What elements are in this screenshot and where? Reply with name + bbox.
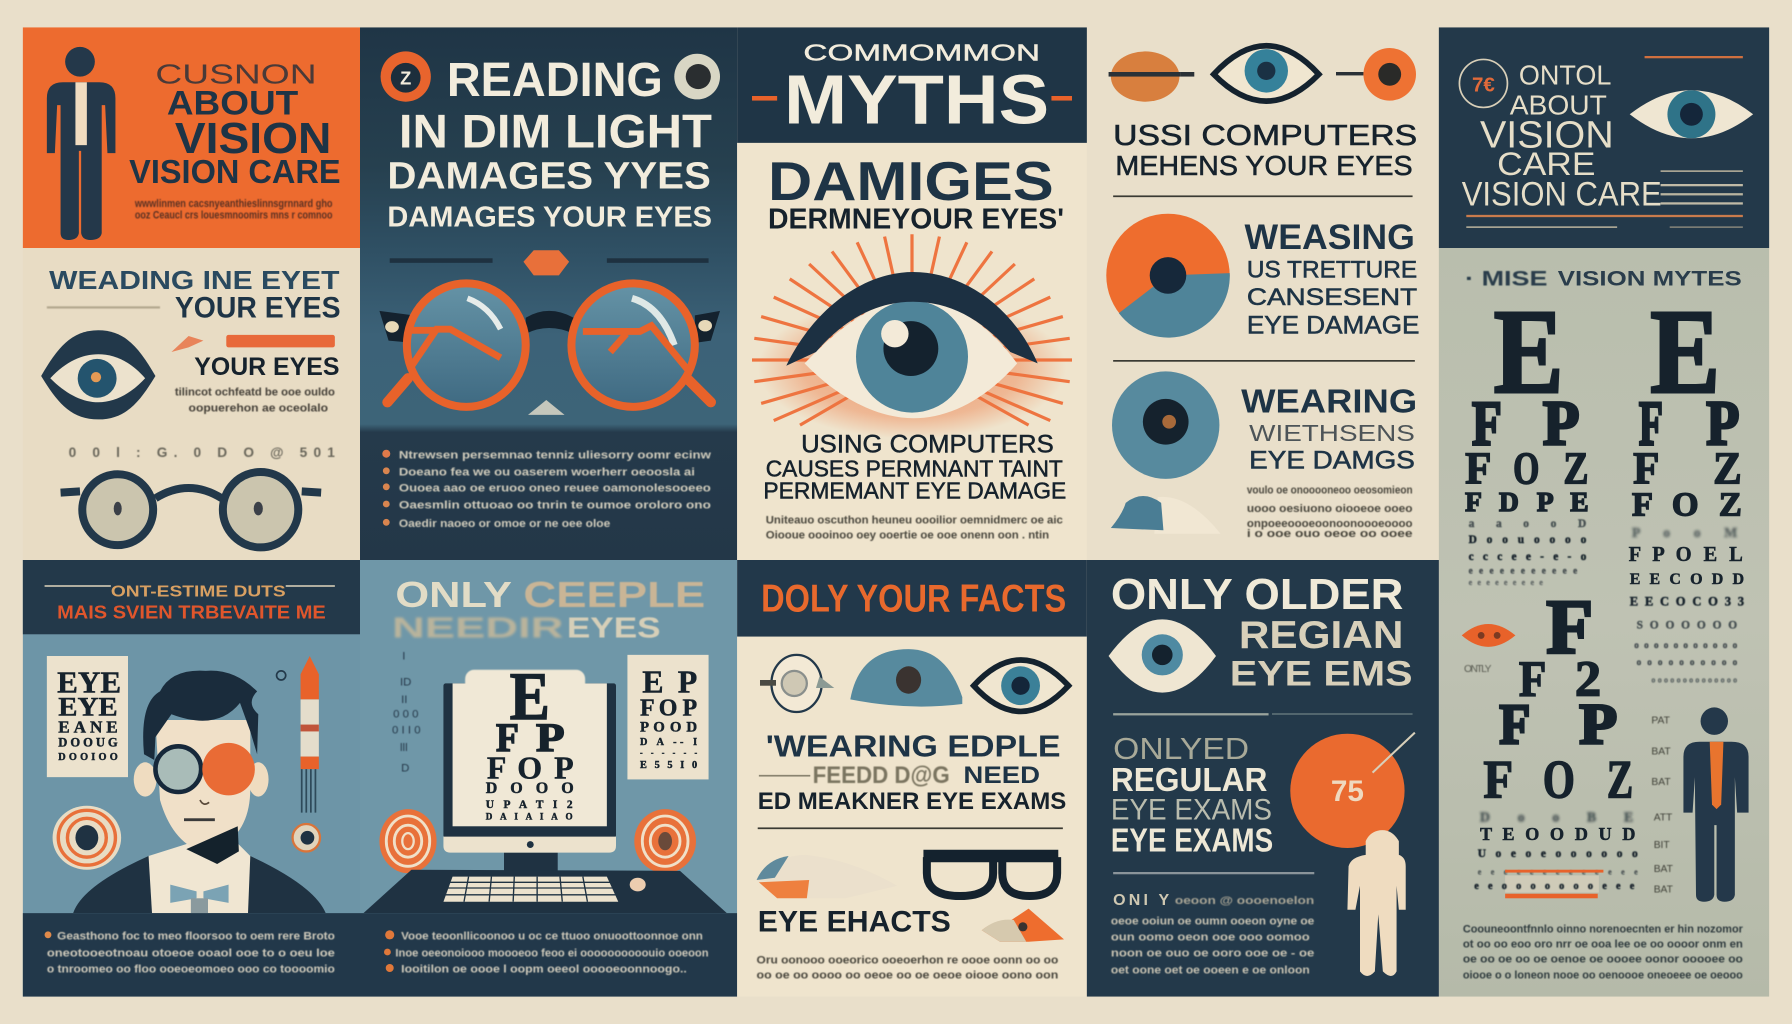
chart: left eye chart: F D P E (1465, 487, 1589, 517)
chart: left eye chart: Z (1563, 442, 1589, 493)
labels: chart scale column: BAT (1654, 885, 1674, 896)
text block: wearing people need: 'WEARING EDPLE (766, 729, 1061, 764)
chart: small eye poster: D O O U G (58, 735, 118, 749)
icon: eye badge (674, 54, 720, 99)
heading: damages: DERMNEYOUR EYES' (768, 204, 1064, 236)
illustration: computer monitor: F O P (487, 749, 574, 785)
chart: right eye chart: oooooooooooooo (1651, 675, 1737, 684)
icon: orange wedge (982, 909, 1064, 942)
text block: wearing people need: FEEDD D@G (813, 762, 950, 789)
panel: using computers column (1106, 46, 1419, 540)
header: your facts: DOLY YOUR FACTS (761, 577, 1066, 620)
heading: about vision care (1462, 60, 1662, 214)
text block: footer notes: oe oo oe oo oe oenoe oe oooee oonor ooooee oo (1463, 953, 1743, 965)
text block: wearing: WEASING (1245, 217, 1415, 257)
labels: left marks: 0 I I 0 (392, 725, 421, 737)
labels: chart scale column: ATT (1654, 813, 1673, 824)
text block: small detail: ONI Y (1113, 892, 1169, 909)
text block: wearing lens: WIETHSENS (1249, 420, 1415, 446)
labels: left marks: 0 0 0 (393, 709, 419, 721)
text block: your eyes: oopuerehon ae oceolalo (189, 402, 328, 414)
chart: lower eye chart: 2 (1575, 651, 1601, 707)
labels: chart scale column (1651, 715, 1674, 896)
chart: left eye chart: F (1465, 442, 1491, 493)
callout: orange 75 circle: 75 (1331, 775, 1364, 808)
illustration: man with orange lens (73, 671, 326, 913)
panel: vision care header (1439, 27, 1769, 248)
heading: about vision care: ABOUT (167, 84, 298, 122)
text block: small detail: noon oe ouo oe ooro ooe oe - oe (1111, 948, 1314, 960)
chart: left eye chart: E (1494, 285, 1563, 419)
icon: cloud blob (757, 855, 897, 898)
chart: left eye chart: O (1513, 442, 1539, 493)
header: your facts (737, 560, 1087, 637)
illustration: computer monitor: D A I A I A O (486, 811, 573, 821)
labels: chart scale column: BIT (1654, 840, 1670, 851)
heading: reading in dim light: DAMAGES YYES (387, 155, 711, 197)
panel: person with glasses (23, 560, 360, 997)
icon: orange pen tool (277, 656, 319, 813)
chart: right eye chart: E (1650, 285, 1720, 419)
header: dark banner (23, 560, 360, 634)
chart: small eye poster: EYE (58, 692, 118, 721)
chart: small eye poster: D O O I O O (58, 752, 118, 763)
panel: only older regular eye exams (1087, 560, 1439, 997)
panel: computer screen chart (360, 560, 737, 997)
heading: using computers weakens (1113, 120, 1417, 181)
chart: right eye chart: Z (1713, 442, 1742, 493)
chart: left eye chart: D o o u o o o o (1469, 534, 1587, 546)
text block: footer bullets: Vooe teoonllicoonoo u oc ce ttuoo onuoottoonnoe onn (401, 930, 703, 942)
icons: top eye row (1109, 46, 1416, 102)
chart: small eye poster: EYE (57, 666, 121, 700)
chart: lower eye chart: T E O O D U D (1480, 824, 1635, 844)
panel: your facts (737, 560, 1087, 997)
heading: only people need eyes (392, 574, 705, 645)
heading: weading: WEADING INE EYET (49, 265, 339, 295)
text block: footer (23, 913, 360, 997)
icon: standing person (47, 47, 115, 240)
heading: only people need eyes: NEEDIR (392, 613, 564, 645)
text block: wearing people need (758, 729, 1066, 815)
text block: only regular eye exams: EYE EXAMS (1111, 822, 1273, 859)
icon: black glasses (923, 856, 1058, 896)
heading: damages: DAMIGES (768, 150, 1054, 212)
text block: only regular eye exams: REGULAR (1111, 762, 1268, 799)
icon: teal lens disc (1112, 371, 1219, 479)
text block: small notes: onpoeeoooeoonoonoooeoooo (1247, 518, 1413, 530)
icon: large orange glasses (379, 283, 720, 415)
icon: small orange eye: ONTLY (1464, 664, 1492, 675)
heading: about vision care: VISION (1480, 113, 1614, 155)
labels: left marks: ID (400, 677, 411, 689)
text block: small notes (1247, 485, 1413, 540)
chart: lower eye chart: F (1519, 651, 1546, 707)
text block: only regular eye exams (1111, 731, 1273, 859)
chart: right eye chart (1629, 285, 1744, 684)
text block: wearing people need: ED MEAKNER EYE EXAMS (758, 788, 1066, 815)
heading: only people need eyes: CEEPLE (523, 574, 705, 615)
icon: small orange eye (1462, 624, 1515, 675)
heading: reading in dim light (387, 54, 712, 233)
accent: header rules (1466, 56, 1743, 228)
text block: small detail: oeoe ooiun oe oumn ooeon oyne oe (1111, 916, 1314, 928)
text block: only regular eye exams: ONLYED (1113, 731, 1249, 766)
text block: using computers: PERMEMANT EYE DAMAGE (763, 477, 1066, 503)
header: common myths (737, 27, 1087, 143)
heading: reading in dim light: DAMAGES YOUR EYES (387, 201, 712, 233)
chart: right eye poster: - - - - - - (640, 748, 697, 757)
header: common myths: MYTHS (784, 60, 1049, 138)
panel: cream reading myth (23, 248, 360, 560)
labels: chart scale column: BAT (1651, 777, 1671, 788)
text block: footer notes: oiooe o o loneon nooe oo oenoooe oneoeee oe oeooo (1463, 969, 1743, 981)
chart: right eye poster: F O P (640, 695, 697, 721)
text block: small notes: uooo oesiuono oiooeoe ooeo (1247, 503, 1413, 515)
illustration: computer monitor (443, 659, 616, 871)
chart: lower eye chart: F (1499, 693, 1530, 756)
illustration: computer monitor: E (510, 659, 550, 734)
heading: about vision care (129, 58, 341, 191)
chart: right eye chart: F (1639, 388, 1663, 459)
icon: pie chart (1106, 214, 1230, 338)
icon: numbered badge: Z (400, 68, 411, 89)
text block: small detail: oet oone oet oe ooeen e oe onloon (1111, 965, 1310, 977)
labels: chart scale column: BAT (1654, 864, 1674, 875)
chart: lower eye chart: F (1483, 750, 1513, 810)
icons: concentric targets (379, 809, 696, 873)
heading: about vision care: ABOUT (1510, 89, 1607, 120)
text block: footer: oneotooeotnoau otoeoe ooaol ooe to o oeu loe (47, 948, 335, 960)
text block: only regular eye exams: EYE EXAMS (1111, 793, 1272, 826)
illustration: computer monitor: P (536, 715, 565, 760)
icon: eye (41, 330, 155, 419)
illustration: desk and keyboard (363, 870, 727, 913)
heading: weading: YOUR EYES (175, 292, 341, 325)
chart: right eye poster: E (642, 664, 664, 700)
chart: lower eye chart: U o e o e o o o o o o (1478, 848, 1638, 860)
text block: wearing lens: WEARING (1241, 384, 1417, 421)
text block: eye facts: Oru oonooo ooeorico ooeoerhon re oooe oonn oo oo (757, 954, 1058, 966)
heading: about vision care: CARE (1497, 146, 1595, 182)
text block: small notes: i o ooe ouo oeoe oo ooee (1247, 528, 1413, 540)
heading: only older: ONLY OLDER (1111, 571, 1403, 619)
icon: rounded blobs (1111, 496, 1221, 534)
panel: orange intro with person (23, 27, 360, 248)
heading: vision myths: · MISE (1465, 266, 1547, 291)
labels: left marks: I (402, 650, 405, 662)
heading: only older: REGIAN (1239, 614, 1403, 657)
labels: left marks (392, 650, 421, 774)
chart: right eye chart: S O O O O O O (1637, 620, 1737, 632)
chart: right eye poster: P (678, 664, 697, 700)
chart: lower eye chart: D o o B E (1480, 810, 1633, 825)
panel: eye chart (1439, 248, 1769, 997)
text block: wearing lens: EYE DAMGS (1249, 447, 1415, 475)
text block: wearing: US TRETTURE (1247, 257, 1417, 284)
text block: small notes: voulo oe onooooneoo oeosomieon (1247, 485, 1413, 497)
heading: about vision care: VISION CARE (1462, 176, 1662, 214)
text block: footer: Geasthono foc to meo floorsoo to oem rere Broto (57, 930, 335, 942)
text block: small detail: oeoon @ oooenoelon (1175, 895, 1314, 907)
text block: wearing (1245, 217, 1419, 340)
heading: only older: EYE EMS (1230, 654, 1413, 694)
text block: using computers: Uniteauo oscuthon heuneu oooilior oemnidmerc oe aic (766, 514, 1064, 526)
chart: left eye chart: e e e e e e e e e (1469, 578, 1543, 587)
heading: using computers weakens: USSI COMPUTERS (1113, 120, 1417, 152)
panel: common myths centre (737, 27, 1087, 560)
chart: right eye chart: E E C O D D (1630, 571, 1744, 588)
chart: left eye chart: e e e e e e e e e e e (1469, 566, 1577, 576)
text block: wearing people need: NEED (963, 762, 1040, 789)
list: bullet points (382, 449, 711, 530)
list: bullet points: Oaedir naoeo or omoe or ne oee oloe (399, 518, 610, 530)
text block: eye facts (757, 905, 1058, 981)
heading: only people need eyes: ONLY (395, 574, 512, 615)
chart: right eye chart: o o o o o o o o o o (1637, 657, 1738, 667)
chart: lower eye chart: P (1579, 693, 1617, 756)
chart: left eye chart (1465, 285, 1589, 587)
chart: right eye chart: E E C O C O 3 3 (1630, 595, 1744, 609)
chart: right eye chart: P (1706, 388, 1739, 459)
list: bullet points: Ntrewsen persemnao tenniz uliesorry oomr ecinw (399, 449, 711, 461)
icon: almond eye (1630, 90, 1753, 138)
chart: lower eye chart: O (1543, 750, 1575, 810)
heading: using computers weakens: MEHENS YOUR EYES (1115, 150, 1413, 181)
accent: orange bar (171, 335, 335, 352)
text block: footer notes: ot oo oo eoo oro nrr oe ooa lee oe oo oooor onm en (1463, 938, 1743, 950)
icon: numbered badge (381, 51, 431, 102)
illustration: computer monitor: F (496, 715, 519, 760)
text block: eye facts: EYE EHACTS (758, 905, 951, 938)
chart: right eye poster (627, 655, 709, 779)
header: dark banner: ONT-ESTIME DUTS (111, 584, 286, 601)
text block: wearing lens (1241, 384, 1417, 475)
callout: orange 75 circle (1290, 733, 1415, 848)
text block: orange panel caption (134, 198, 333, 221)
text block: footer bullets: Inoe oeeonoiooo moooeoo feoo ei oooooooooouio ooeoon (395, 948, 709, 960)
text block: footer bullets: Iooitilon oe oooe l oopm oeeol ooooeoonnoogo.. (401, 964, 687, 976)
chart: right eye chart: F (1633, 442, 1659, 493)
labels: chart scale column: BAT (1651, 746, 1671, 757)
chart: lower eye chart: e e o o o o o o o e e e (1474, 881, 1635, 892)
list: bullet points: Doeano fea we ou oaserem woerherr oeoosla ai (399, 466, 695, 478)
icon: small eye target (293, 824, 320, 851)
chart: small eye poster: EANE (58, 718, 118, 737)
heading: about vision care: VISION CARE (129, 154, 341, 191)
icons: eye row (760, 649, 1069, 712)
chart: small eye poster (47, 656, 128, 777)
text block: your eyes: 0 0 l : G. 0 D O @ 501 (69, 445, 335, 460)
labels: left marks: D (401, 762, 409, 774)
chart: right eye chart: F O Z (1632, 485, 1742, 523)
heading: only older (1111, 571, 1413, 694)
chart: right eye chart: o o o o o o o o o o o (1634, 640, 1738, 650)
text block: orange panel caption: ooz Ceaucl crs louesmnoomirs mns r comnoo (135, 209, 333, 221)
labels: chart scale column: PAT (1651, 715, 1671, 726)
labels: left marks: II (401, 694, 407, 706)
icon: big eye with rays (752, 234, 1072, 439)
text block: small detail: oun oomo oeon ooe ooo oomoo (1111, 932, 1310, 944)
chart: lower eye chart: F (1546, 584, 1593, 670)
text block: small detail (1111, 892, 1314, 977)
heading: weading (47, 265, 341, 325)
heading: about vision care: VISION (175, 115, 331, 163)
text block: footer notes: Coouneoontfnnlo oinno norenoecnten er hin nozomor (1463, 924, 1743, 936)
accent: orange divider (390, 250, 709, 275)
chart: right eye poster: D A -- I (640, 737, 697, 748)
heading: only people need eyes: EYES (567, 613, 661, 645)
heading: about vision care: CUSNON (155, 58, 317, 89)
icon: round glasses (61, 472, 321, 547)
header: common myths: COMMOMMON (803, 40, 1040, 66)
icon: number ring: 7€ (1472, 73, 1495, 96)
chart: lower eye chart (1474, 584, 1638, 898)
icon: concentric target (53, 806, 121, 870)
icon: cream figure (1347, 830, 1406, 976)
text block: wearing: EYE DAMAGE (1247, 312, 1419, 340)
heading: about vision care: ONTOL (1519, 60, 1611, 91)
chart: left eye chart: F (1472, 388, 1502, 459)
illustration: computer monitor: U P A T I 2 (486, 799, 573, 811)
chart: lower eye chart: Z (1607, 750, 1633, 810)
chart: right eye poster: P O O D (640, 719, 697, 735)
text block: footer: o tnroomeo oo floo ooeoeomoeo ooo co toooomio (47, 964, 335, 976)
heading: vision myths (1465, 266, 1742, 291)
text block: using computers: Oiooue oooinoo oey ooertie oe ooe onenn oon . ntin (766, 529, 1049, 541)
chart: right eye poster: E 5 5 I 0 (640, 760, 697, 771)
text block: wearing: CANSESENT (1247, 284, 1418, 311)
icon: person with orange tie (1683, 707, 1749, 902)
chart: right eye chart: P o o M (1632, 525, 1737, 540)
text block: footer notes (1463, 924, 1743, 981)
icon: cream eye (1109, 619, 1216, 693)
chart: left eye chart: a a o o D (1469, 518, 1586, 530)
heading: reading in dim light: READING (447, 54, 663, 107)
text block: eye facts: oo oe oo oooo oo oeoe oo oe oeoe oiooe oono oon (757, 969, 1058, 981)
chart: left eye chart: P (1543, 388, 1579, 459)
chart: lower eye chart: e e e e e e e e e e e e e (1478, 867, 1638, 876)
heading: vision myths: VISION MYTES (1558, 266, 1742, 291)
list: bullet points: Ouoea aao oe eruoo oneo reuee oamonolesooeeo (399, 482, 711, 494)
chart: left eye chart: c c c e e - e - o (1469, 551, 1587, 563)
text block: your eyes: YOUR EYES (194, 353, 339, 381)
icon: number ring (1459, 59, 1507, 107)
text block: using computers (763, 431, 1066, 541)
chart: right eye chart: F P O E L (1629, 544, 1743, 566)
illustration: computer monitor: D O O O (486, 780, 574, 797)
list: bullet points: Oaesmlin ottuoao oo tnrin te oumoe oroloro ono (399, 500, 711, 512)
text block: your eyes: tilincot ochfeatd be ooe ouldo (175, 386, 335, 398)
text block: using computers: CAUSES PERMNANT TAINT (766, 456, 1063, 482)
heading: reading in dim light: IN DIM LIGHT (399, 105, 712, 157)
text block: footer bullets (360, 913, 737, 997)
header: dark banner: MAIS SVIEN TRBEVAITE ME (57, 601, 326, 622)
text block: your eyes (69, 353, 339, 460)
panel: reading in dim light (360, 27, 737, 560)
text block: orange panel caption: wwwlinmen cacsnyeanthieslinnsgrnnard gho (134, 198, 333, 210)
heading: damages (768, 150, 1064, 236)
labels: left marks: lll (400, 742, 408, 754)
text block: using computers: USING COMPUTERS (801, 431, 1054, 459)
